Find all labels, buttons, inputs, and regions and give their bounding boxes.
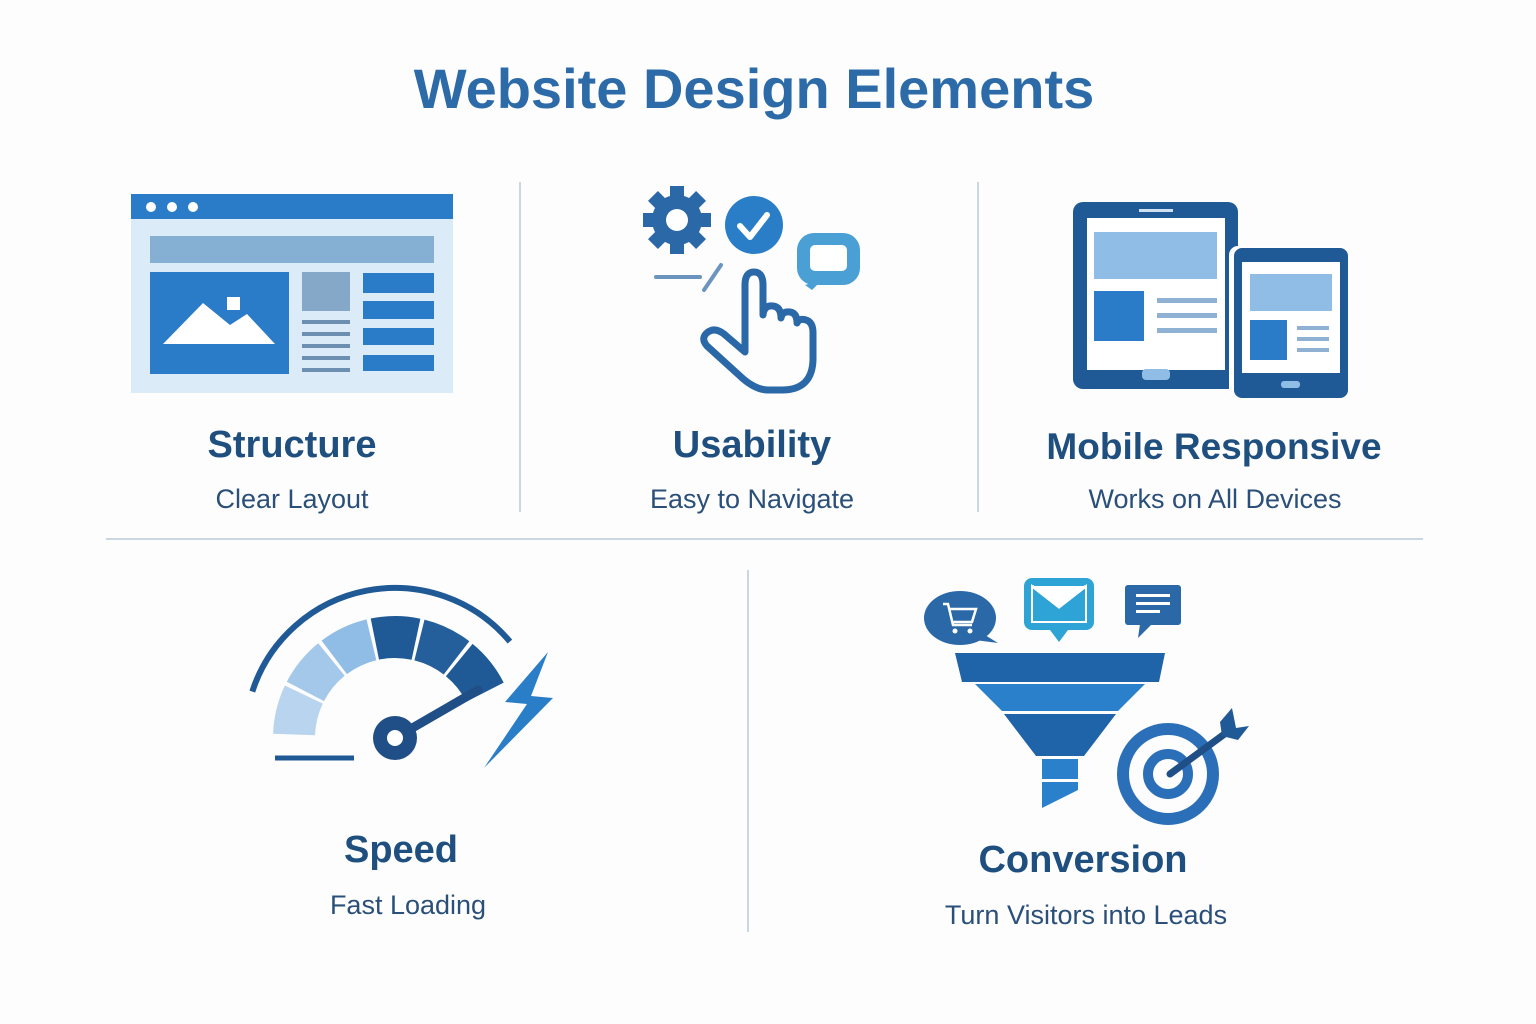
heading: mobile responsive: Mobile Responsive xyxy=(1046,426,1382,467)
panel: conversion xyxy=(924,578,1249,930)
heading: conversion: Conversion xyxy=(978,839,1188,881)
subtitle: mobile responsive: Works on All Devices xyxy=(1088,484,1342,514)
title: Website Design Elements xyxy=(414,57,1094,120)
icon: funnel and target xyxy=(924,578,1249,819)
panel: usability xyxy=(629,172,860,514)
subtitle: conversion: Turn Visitors into Leads xyxy=(945,900,1227,930)
icon: hand with gear, check, chat xyxy=(629,172,860,390)
heading: structure: Structure xyxy=(208,424,376,466)
heading: speed: Speed xyxy=(344,829,458,871)
panel: speed xyxy=(252,588,553,920)
subtitle: speed: Fast Loading xyxy=(330,890,486,920)
subtitle: structure: Clear Layout xyxy=(215,484,369,514)
panel: mobile responsive xyxy=(1046,202,1382,514)
subtitle: usability: Easy to Navigate xyxy=(650,484,854,514)
icon: speedometer xyxy=(252,588,553,768)
icon: browser layout xyxy=(131,194,453,393)
icon: tablet and phone xyxy=(1073,202,1348,398)
panel: structure xyxy=(131,194,453,514)
heading: usability: Usability xyxy=(673,424,831,466)
